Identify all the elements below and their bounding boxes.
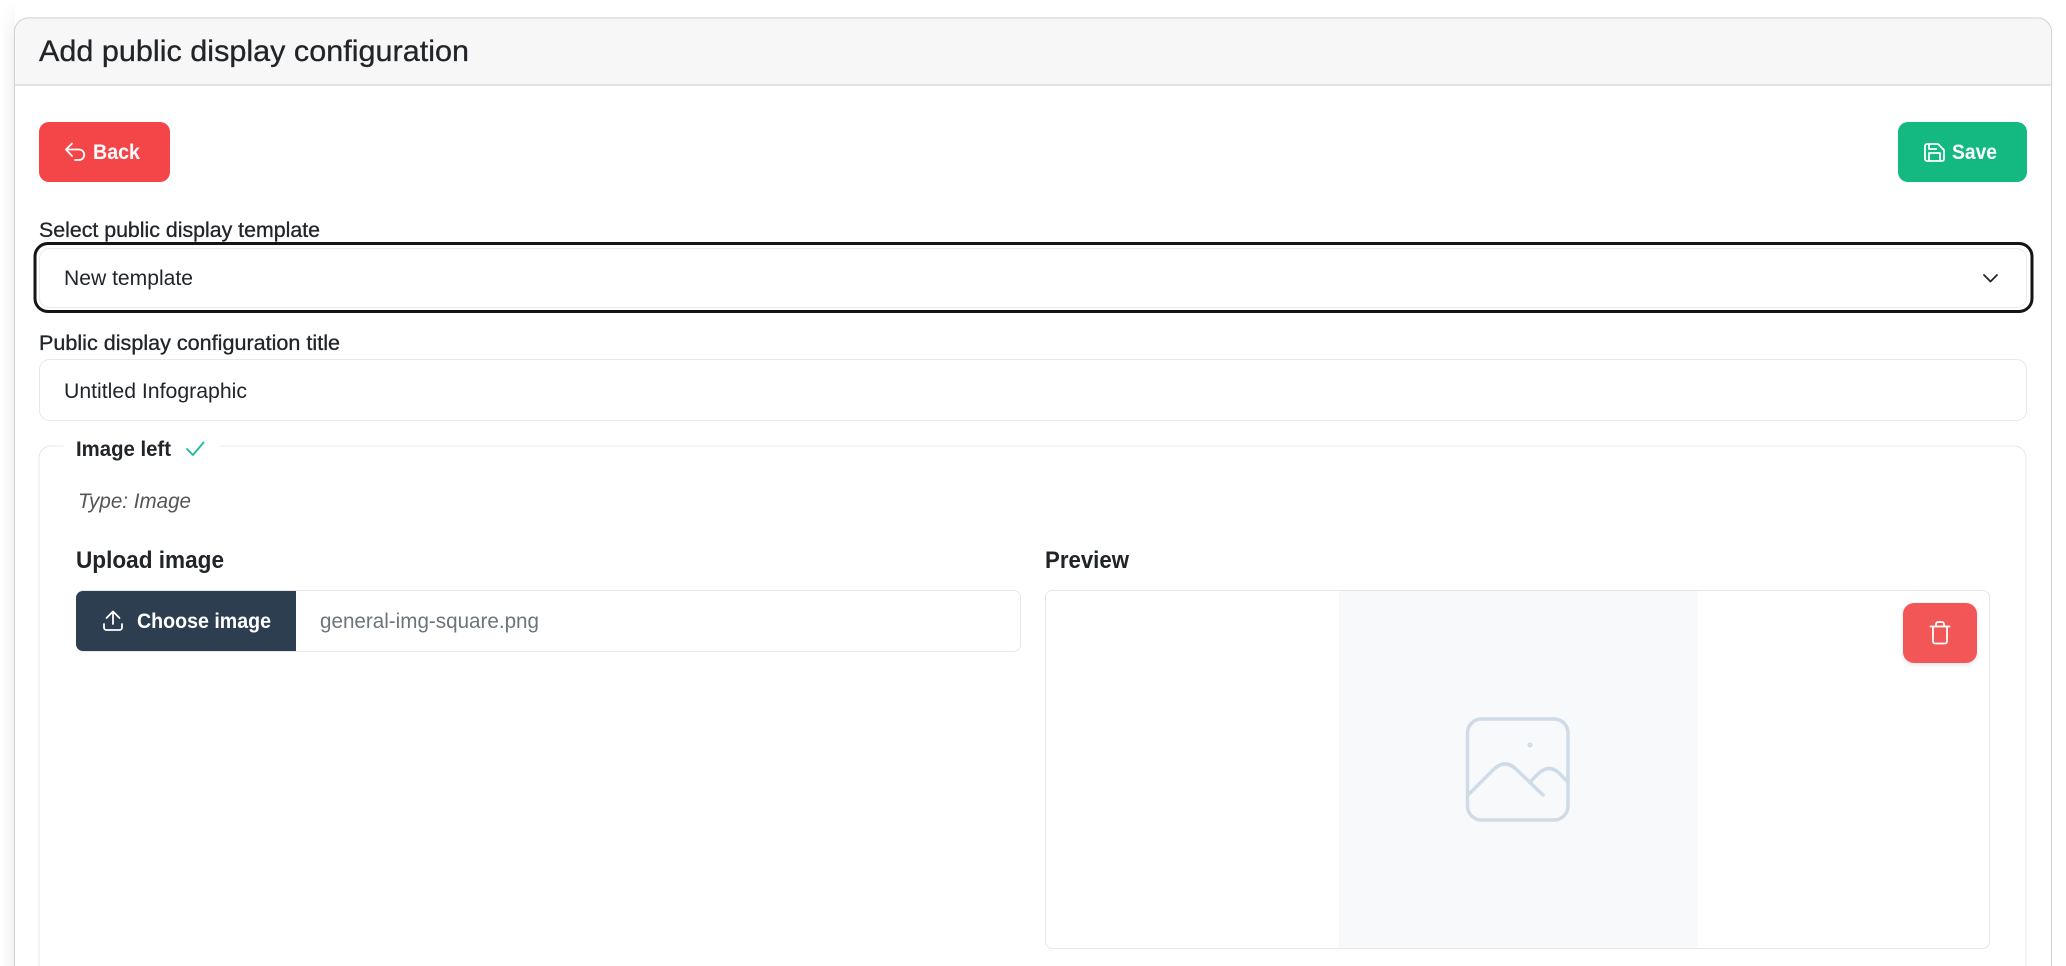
input: configuration title: [40, 360, 2026, 420]
file name: general-img-square.png: [320, 610, 539, 633]
card header bar: [15, 18, 2051, 85]
label: select template: Select public display template: [39, 219, 320, 242]
dropdown: template select: [35, 244, 2032, 312]
button: delete image: [1903, 603, 1977, 663]
heading: preview: Preview: [1045, 547, 1130, 574]
icon: undo arrow: [66, 144, 84, 160]
button: choose image: [76, 591, 296, 651]
button: save: [1898, 122, 2027, 182]
type note: Type: Image: [78, 490, 191, 513]
icon: floppy disk: [1925, 144, 1944, 161]
icon: trash can: [1930, 622, 1950, 644]
heading: page title: Add public display configuration: [39, 35, 469, 68]
choose image label: Choose image: [137, 609, 271, 633]
icon: check mark: [187, 442, 204, 455]
label: configuration title: Public display configuration title: [39, 332, 340, 355]
icon: upload: [104, 612, 122, 630]
panel: image preview: [1046, 590, 1990, 948]
panel: image left fieldset: [39, 437, 2026, 966]
save label: Save: [1952, 140, 1997, 164]
heading: upload image: Upload image: [76, 547, 224, 574]
icon: chevron down: [1984, 275, 1997, 282]
input value: Untitled Infographic: [64, 380, 247, 403]
back label: Back: [93, 140, 140, 164]
dropdown value: New template: [64, 267, 193, 290]
button: back: [39, 122, 170, 182]
file input: [76, 590, 1020, 652]
icon: image placeholder: [1468, 719, 1568, 820]
legend: image left: Image left: [76, 437, 171, 461]
